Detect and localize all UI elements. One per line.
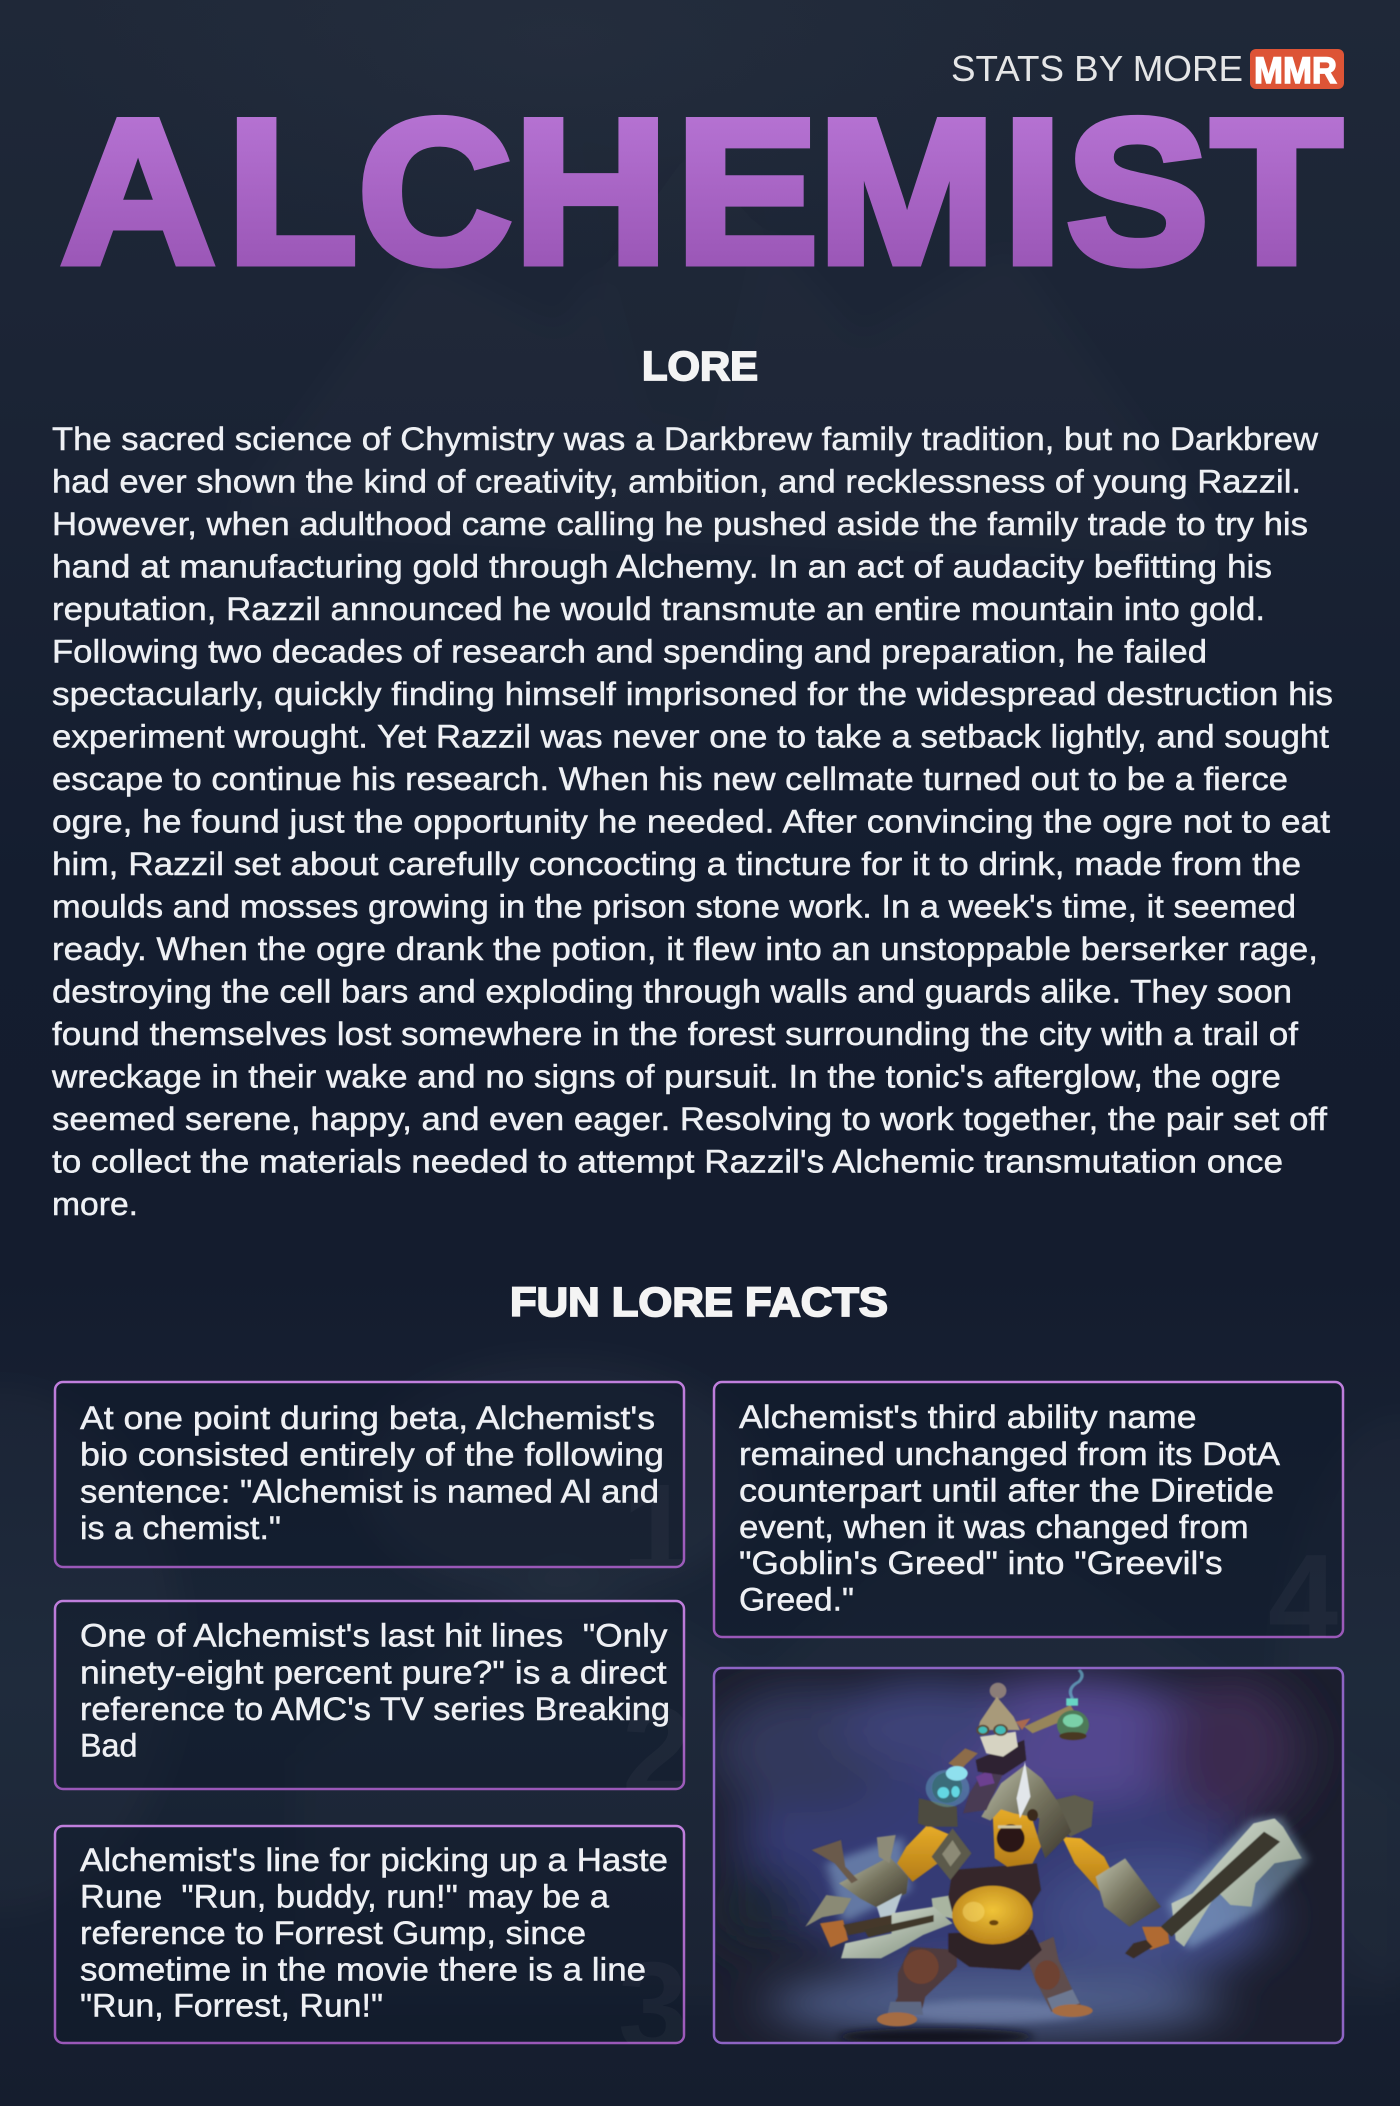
title: ALCHEMIST (61, 78, 1342, 306)
lore text block (51, 421, 1333, 1222)
left weapon (840, 1894, 954, 1959)
lore text block: spectacularly, quickly finding himself imprisoned for the widespread destruction his (52, 676, 1333, 712)
panel: fact 1: is a chemist." (80, 1510, 281, 1546)
lore text block: more. (52, 1186, 138, 1222)
panel: fact 2: 2 (622, 1681, 692, 1822)
panel: fact 3: reference to Forrest Gump, since (80, 1915, 586, 1951)
panel: fact 2: reference to AMC's TV series Breaking (80, 1691, 670, 1727)
lore text block: experiment wrought. Yet Razzil was never one to take a setback lightly, and sought (52, 718, 1329, 754)
panel: fact 3: Rune "Run, buddy, run!" may be a (80, 1879, 609, 1915)
panel: fact 2: One of Alchemist's last hit lines "Only (80, 1618, 668, 1654)
right weapon (1161, 1818, 1302, 1947)
portrait backdrop (713, 1667, 1344, 2045)
lore text block: had ever shown the kind of creativity, ambition, and recklessness of young Razzil. (52, 464, 1301, 500)
lore text block: seemed serene, happy, and even eager. Resolving to work together, the pair set off (52, 1101, 1327, 1137)
panel: fact 4: counterpart until after the Diretide (739, 1473, 1274, 1509)
lore text block: escape to continue his research. When his new cellmate turned out to be a fierce (52, 761, 1288, 797)
flask (1057, 1670, 1089, 1740)
ogre head and helmet (981, 1762, 1071, 1867)
stats label: STATS BY MORE (951, 48, 1243, 89)
lore text block: hand at manufacturing gold through Alchemy. In an act of audacity befitting his (52, 548, 1272, 584)
panel: fact 1 (54, 1380, 686, 1568)
panel: fact 3: 3 (618, 1936, 688, 2077)
panel: fact 1: At one point during beta, Alchemist's (80, 1400, 655, 1436)
panel: fact 4: 4 (1268, 1528, 1338, 1669)
ogre legs (877, 1930, 1093, 2026)
heading: lore: LORE (642, 343, 758, 389)
panel: fact 3: sometime in the movie there is a line (80, 1951, 646, 1987)
right arm and bracer (1062, 1837, 1169, 1958)
lore text block: destroying the cell bars and exploding through walls and guards alike. They soon (52, 974, 1292, 1010)
glow behind weapons (826, 1817, 1308, 1950)
lore text block: ogre, he found just the opportunity he needed. After convincing the ogre not to eat (52, 804, 1330, 840)
lore text block: him, Razzil set about carefully concocting a tincture for it to drink, made from the (52, 846, 1301, 882)
panel: fact 3: Alchemist's line for picking up a Haste (80, 1842, 668, 1878)
panel: fact 4 (714, 1382, 1343, 1669)
panel: fact 3 (54, 1824, 686, 2044)
lore text block: ready. When the ogre drank the potion, it flew into an unstoppable berserker rage, (52, 931, 1318, 967)
lore text block: to collect the materials needed to attempt Razzil's Alchemic transmutation once (52, 1144, 1283, 1180)
shoulder armor (918, 1795, 1094, 1880)
stats by more mmr credit (951, 48, 1344, 91)
panel: fact 4: Alchemist's third ability name (739, 1399, 1196, 1435)
panel: fact 2: ninety-eight percent pure?" is a direct (80, 1654, 667, 1690)
glowing orb (926, 1766, 969, 1807)
heading: fun lore facts: FUN LORE FACTS (510, 1279, 888, 1325)
lore text block: reputation, Razzil announced he would transmute an entire mountain into gold. (52, 591, 1265, 627)
lore text block: However, when adulthood came calling he pushed aside the family trade to try his (52, 506, 1308, 542)
panel: fact 1: 1 (622, 1458, 692, 1599)
panel: hero portrait (713, 1667, 1344, 2045)
lore text block: wreckage in their wake and no signs of pursuit. In the tonic's afterglow, the ogre (51, 1058, 1281, 1094)
lore text block: found themselves lost somewhere in the forest surrounding the city with a trail of (52, 1016, 1298, 1052)
mmr logo badge: MMR (1254, 50, 1337, 91)
panel: fact 2 (54, 1600, 686, 1790)
alchemist rider (948, 1683, 1077, 1813)
lore text block: The sacred science of Chymistry was a Darkbrew family tradition, but no Darkbrew (52, 421, 1319, 457)
left arm and bracer (805, 1825, 955, 1947)
panel: fact 1: sentence: "Alchemist is named Al and (80, 1473, 659, 1509)
panel: fact 4: Greed." (739, 1582, 854, 1618)
panel: fact 4: remained unchanged from its DotA (739, 1436, 1281, 1472)
panel: fact 4: "Goblin's Greed" into "Greevil's (739, 1545, 1223, 1581)
ogre torso and belly (948, 1863, 1041, 1944)
lore text block: moulds and mosses growing in the prison stone work. In a week's time, it seemed (52, 888, 1296, 924)
panel: fact 1: bio consisted entirely of the following (80, 1437, 664, 1473)
panel: fact 3: "Run, Forrest, Run!" (80, 1988, 383, 2024)
panel: fact 2: Bad (80, 1728, 138, 1764)
panel: fact 4: event, when it was changed from (739, 1509, 1249, 1545)
lore text block: Following two decades of research and spending and preparation, he failed (52, 634, 1207, 670)
